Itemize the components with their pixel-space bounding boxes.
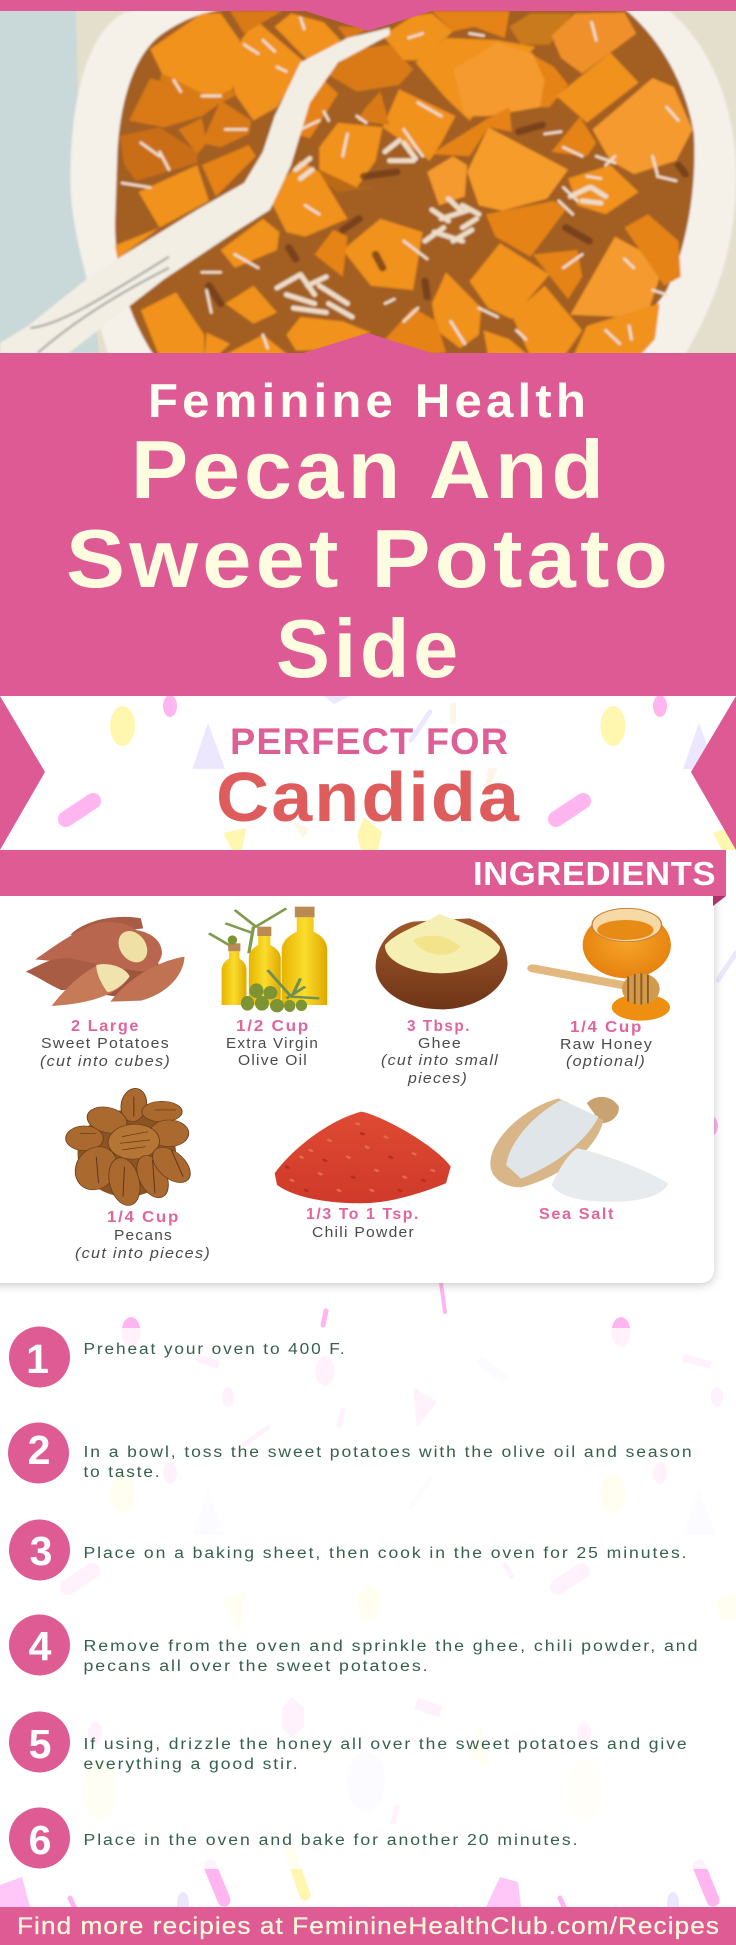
sweet potato cubes xyxy=(115,11,693,357)
title: Pecan And: Pecan And xyxy=(131,423,608,516)
title panel xyxy=(0,333,736,696)
ingredient label: raw honey xyxy=(560,1019,653,1070)
ingredient label: chili powder xyxy=(306,1206,420,1241)
ingredient label: ghee: (cut into small xyxy=(381,1052,499,1069)
step 4: 4 xyxy=(29,1623,52,1669)
ingredient label: pecans xyxy=(75,1209,211,1262)
candida label: Candida xyxy=(216,758,521,836)
icon: sea salt scoop xyxy=(490,1097,668,1202)
title: Side: Side xyxy=(276,602,462,695)
ingredient label: chili powder: 1/3 To 1 Tsp. xyxy=(306,1206,420,1223)
step 1 xyxy=(9,1326,346,1388)
ingredient label: sweet potatoes xyxy=(40,1018,171,1070)
ingredient label: ghee xyxy=(381,1018,499,1087)
perfect for label: PERFECT FOR xyxy=(230,721,509,762)
step 1: 1 xyxy=(26,1336,49,1382)
icon: ghee bowl xyxy=(376,914,508,1009)
step 5: 5 xyxy=(29,1721,51,1767)
ingredient label: sweet potatoes: Sweet Potatoes xyxy=(41,1035,170,1052)
ingredient label: sweet potatoes: (cut into cubes) xyxy=(40,1053,171,1070)
step 2: to taste. xyxy=(84,1464,162,1481)
ingredient label: pecans: Pecans xyxy=(114,1227,173,1244)
ingredient label: olive oil: Olive Oil xyxy=(238,1052,308,1069)
ingredient label: raw honey: (optional) xyxy=(566,1053,646,1070)
coconut clusters xyxy=(277,141,606,317)
ingredient label: ghee: Ghee xyxy=(418,1035,462,1052)
step 3: Place on a baking sheet, then cook in the oven for 25 minutes. xyxy=(84,1545,688,1562)
banner: perfect for candida xyxy=(0,696,736,850)
step 6: Place in the oven and bake for another 20 minutes. xyxy=(84,1832,580,1849)
step 6 xyxy=(9,1808,580,1868)
ingredients header band: INGREDIENTS xyxy=(473,855,716,892)
ingredient label: olive oil: Extra Virgin xyxy=(226,1035,319,1052)
icon: chili powder xyxy=(275,1112,451,1203)
ingredient label: raw honey: Raw Honey xyxy=(560,1036,653,1053)
fade overlay on lower confetti xyxy=(0,1328,736,1869)
step 2: 2 xyxy=(28,1427,50,1473)
ingredient label: olive oil xyxy=(226,1018,319,1069)
ingredient label: olive oil: 1/2 Cup xyxy=(236,1018,310,1035)
icon: sweet potatoes xyxy=(26,917,185,1006)
ingredient label: pecans: (cut into pieces) xyxy=(75,1245,211,1262)
step 5 xyxy=(9,1712,688,1773)
ingredient label: sweet potatoes: 2 Large xyxy=(71,1018,140,1035)
step 4: pecans all over the sweet potatoes. xyxy=(84,1658,430,1675)
ingredient label: ghee: 3 Tbsp. xyxy=(407,1018,471,1035)
ingredient label: chili powder: Chili Powder xyxy=(312,1224,415,1241)
icon: raw honey jar xyxy=(533,908,671,1021)
confetti background xyxy=(0,695,736,1914)
hero photo: sweet potatoes in a white bowl xyxy=(0,0,736,371)
step 2: In a bowl, toss the sweet potatoes with the olive oil and season xyxy=(84,1444,694,1461)
panel: ingredients xyxy=(0,850,726,1283)
icon: olive oil bottles xyxy=(209,907,327,1012)
step 3 xyxy=(9,1520,688,1580)
ingredient label: sea salt: Sea Salt xyxy=(539,1206,615,1223)
food base xyxy=(115,9,694,357)
banner left ribbon notch xyxy=(0,696,45,850)
ingredient label: raw honey: 1/4 Cup xyxy=(570,1019,643,1036)
ingredient label: pecans: 1/4 Cup xyxy=(107,1209,180,1226)
footer xyxy=(0,1907,736,1945)
step 5: If using, drizzle the honey all over the sweet potatoes and give xyxy=(84,1736,688,1753)
step 6: 6 xyxy=(29,1817,51,1863)
step 5: everything a good stir. xyxy=(84,1756,300,1773)
title: Sweet Potato: Sweet Potato xyxy=(66,512,672,605)
step 4 xyxy=(9,1614,700,1676)
step 1: Preheat your oven to 400 F. xyxy=(84,1341,346,1358)
step 2 xyxy=(8,1422,694,1484)
ingredients header band xyxy=(0,850,726,906)
top pink band with notch xyxy=(0,0,736,31)
dark pecan bits xyxy=(209,125,685,304)
ingredients card xyxy=(0,896,714,1283)
serving spoon xyxy=(0,28,390,357)
icon: pecans xyxy=(66,1088,198,1207)
title: Feminine Health: Feminine Health xyxy=(148,374,590,427)
banner right ribbon notch xyxy=(691,696,736,850)
ingredient label: ghee: pieces) xyxy=(407,1070,468,1087)
shredded coconut flakes xyxy=(122,18,678,348)
step 4: Remove from the oven and sprinkle the ghee, chili powder, and xyxy=(84,1638,700,1655)
step 3: 3 xyxy=(30,1528,52,1574)
footer: Find more recipies at FeminineHealthClub.com/Recipes xyxy=(17,1913,720,1940)
